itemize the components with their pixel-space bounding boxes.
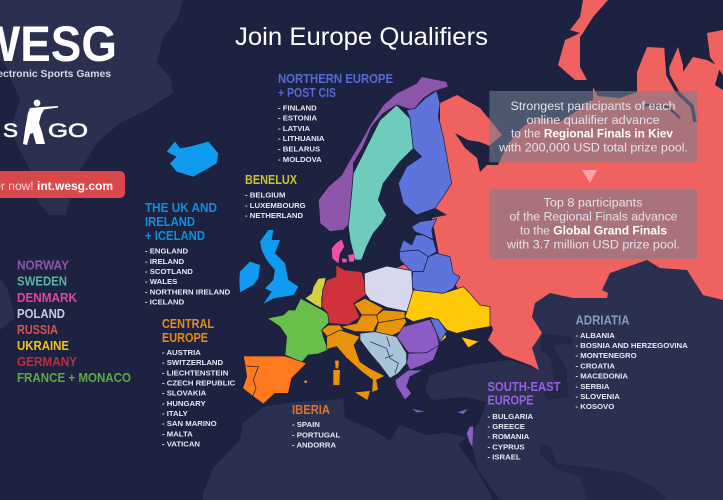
- text block: Adriatia: [576, 314, 688, 411]
- text block: Adriatia: - SERBIA: [576, 382, 610, 391]
- text block: Benelux: - LUXEMBOURG: [245, 201, 306, 210]
- text block: The UK and Ireland + Iceland: [145, 201, 231, 306]
- logo: CS:GO: S: [3, 121, 18, 142]
- region: Russia: [392, 0, 723, 370]
- map of Europe: [167, 0, 723, 447]
- text block: Northern Europe + Post CIS: - FINLAND: [278, 104, 317, 112]
- text block: Central Europe: - HUNGARY: [162, 399, 206, 408]
- callout: global grand finals: [489, 189, 697, 259]
- text block: Iberia: [292, 403, 340, 450]
- text block: Adriatia: - MACEDONIA: [576, 372, 628, 380]
- text block: The UK and Ireland + Iceland: + ICELAND: [145, 229, 205, 243]
- legend: single countries: RUSSIA: [17, 323, 58, 337]
- text block: Central Europe: - AUSTRIA: [162, 348, 201, 357]
- text block: Northern Europe + Post CIS: - LITHUANIA: [278, 134, 325, 143]
- text block: South-East Europe: - BULGARIA: [488, 412, 534, 421]
- text block: Central Europe: - SWITZERLAND: [162, 358, 224, 367]
- text block: Adriatia: - KOSOVO: [576, 402, 614, 411]
- legend: single countries: UKRAINE: [17, 339, 69, 353]
- legend: single countries: SWEDEN: [17, 274, 67, 288]
- logo: CS:GO: [3, 100, 88, 145]
- callout: global grand finals: Top 8 participants: [544, 196, 642, 210]
- legend: single countries: DENMARK: [17, 291, 77, 305]
- button: enter now: [0, 171, 125, 198]
- callout: global grand finals: to the Global Grand Finals: [520, 223, 667, 237]
- text block: Northern Europe + Post CIS: - ESTONIA: [278, 114, 317, 122]
- text block: South-East Europe: SOUTH-EAST: [488, 380, 561, 394]
- Gulf of Ob inlets: [645, 48, 695, 122]
- Western, Central and Southern Europe: [239, 230, 490, 447]
- text block: Adriatia: ADRIATIA: [576, 314, 630, 328]
- logo: CS:GO: GO: [48, 121, 88, 142]
- arrow: down to global finals: [582, 170, 597, 183]
- legend: single countries: [17, 258, 131, 385]
- region: Ukraine: [405, 287, 490, 347]
- text block: South-East Europe: - GREECE: [488, 422, 525, 431]
- region: Benelux: [305, 278, 326, 308]
- text block: Iberia: - ANDORRA: [292, 440, 336, 450]
- region: Adriatia: [360, 332, 407, 378]
- text block: The UK and Ireland + Iceland: - NORTHERN IRELAND: [145, 288, 231, 296]
- legend: single countries: GERMANY: [17, 355, 78, 369]
- text block: Northern Europe + Post CIS: + POST CIS: [278, 86, 336, 100]
- callout: global grand finals: with 3.7 million USD prize pool.: [506, 237, 680, 251]
- text block: Central Europe: CENTRAL: [162, 317, 214, 331]
- region: Germany: [322, 265, 366, 325]
- region: Poland: [364, 266, 413, 312]
- region: Iberia: [243, 356, 307, 404]
- Baltic states and Belarus: [399, 218, 460, 294]
- text block: Adriatia: - BOSNIA AND HERZEGOVINA: [576, 341, 688, 350]
- text block: Benelux: - NETHERLAND: [245, 211, 304, 220]
- text block: The UK and Ireland + Iceland: - SCOTLAND: [145, 267, 193, 276]
- region: France: [267, 298, 331, 362]
- text block: The UK and Ireland + Iceland: - IRELAND: [145, 257, 185, 266]
- text block: South-East Europe: - ROMANIA: [488, 432, 530, 441]
- text block: The UK and Ireland + Iceland: IRELAND: [145, 215, 195, 229]
- text block: The UK and Ireland + Iceland: THE UK AND: [145, 201, 217, 215]
- region: Sweden: [348, 105, 413, 260]
- text block: Central Europe: - CZECH REPUBLIC: [162, 378, 236, 388]
- text block: The UK and Ireland + Iceland: - ICELAND: [145, 298, 185, 306]
- region: South-East Europe: [395, 319, 473, 447]
- text block: South-East Europe: - ISRAEL: [488, 452, 521, 462]
- region: Moldova: [430, 318, 447, 342]
- text block: Adriatia: - SLOVENIA: [576, 392, 620, 401]
- region: Ireland: [239, 262, 260, 292]
- region: Norway: [318, 77, 452, 260]
- legend: single countries: FRANCE + MONACO: [17, 371, 131, 385]
- text block: Adriatia: - CROATIA: [576, 362, 615, 370]
- text block: Benelux: BENELUX: [245, 173, 298, 187]
- callout: regional finals: [489, 91, 697, 162]
- text block: Central Europe: EUROPE: [162, 331, 208, 345]
- text block: South-East Europe: - CYPRUS: [488, 442, 525, 452]
- text block: South-East Europe: [488, 380, 561, 462]
- text block: Northern Europe + Post CIS: - MOLDOVA: [278, 155, 322, 164]
- text block: Iberia: IBERIA: [292, 403, 330, 417]
- text block: Central Europe: - SAN MARINO: [162, 419, 217, 428]
- text block: Central Europe: - VATICAN: [162, 440, 200, 448]
- White Sea: [455, 133, 498, 172]
- callout: regional finals: online qualifier advance: [526, 113, 660, 127]
- text block: Adriatia: - MONTENEGRO: [576, 351, 637, 360]
- callout: regional finals: with 200,000 USD total prize pool.: [498, 140, 688, 154]
- text block: Central Europe: - MALTA: [162, 430, 193, 438]
- text block: Central Europe: - ITALY: [162, 409, 189, 418]
- region: Finland: [398, 91, 452, 215]
- text block: South-East Europe: EUROPE: [488, 394, 534, 408]
- text block: Northern Europe + Post CIS: - BELARUS: [278, 144, 320, 154]
- inland seas: [540, 333, 667, 500]
- title: Join Europe Qualifiers: [235, 23, 488, 51]
- text block: Northern Europe + Post CIS: NORTHERN EUROPE: [278, 72, 393, 86]
- text block: Iberia: - PORTUGAL: [292, 430, 340, 440]
- callout: regional finals: to the Regional Finals in Kiev: [511, 127, 673, 141]
- text block: Central Europe: [162, 317, 236, 448]
- region: Iceland: [167, 142, 218, 177]
- text block: Central Europe: - LIECHTENSTEIN: [162, 368, 229, 378]
- text block: Northern Europe + Post CIS: [278, 72, 393, 164]
- text block: Adriatia: - ALBANIA: [576, 331, 615, 340]
- text block: Northern Europe + Post CIS: - LATVIA: [278, 124, 311, 133]
- text block: Benelux: [245, 173, 306, 220]
- legend: single countries: NORWAY: [17, 258, 70, 272]
- text block: Iberia: - SPAIN: [292, 420, 320, 429]
- icon: soldier: [23, 100, 58, 145]
- text block: The UK and Ireland + Iceland: - ENGLAND: [145, 246, 188, 256]
- text block: Central Europe: - SLOVAKIA: [162, 388, 207, 398]
- text block: The UK and Ireland + Iceland: - WALES: [145, 277, 177, 286]
- text block: Benelux: - BELGIUM: [245, 190, 285, 200]
- region: Denmark: [332, 239, 355, 263]
- callout: global grand finals: of the Regional Finals advance: [510, 210, 678, 224]
- legend: single countries: POLAND: [17, 307, 65, 321]
- callout: regional finals: Strongest participants of each: [510, 99, 676, 113]
- region: Central Europe: [322, 298, 407, 400]
- region: UK: [260, 230, 298, 304]
